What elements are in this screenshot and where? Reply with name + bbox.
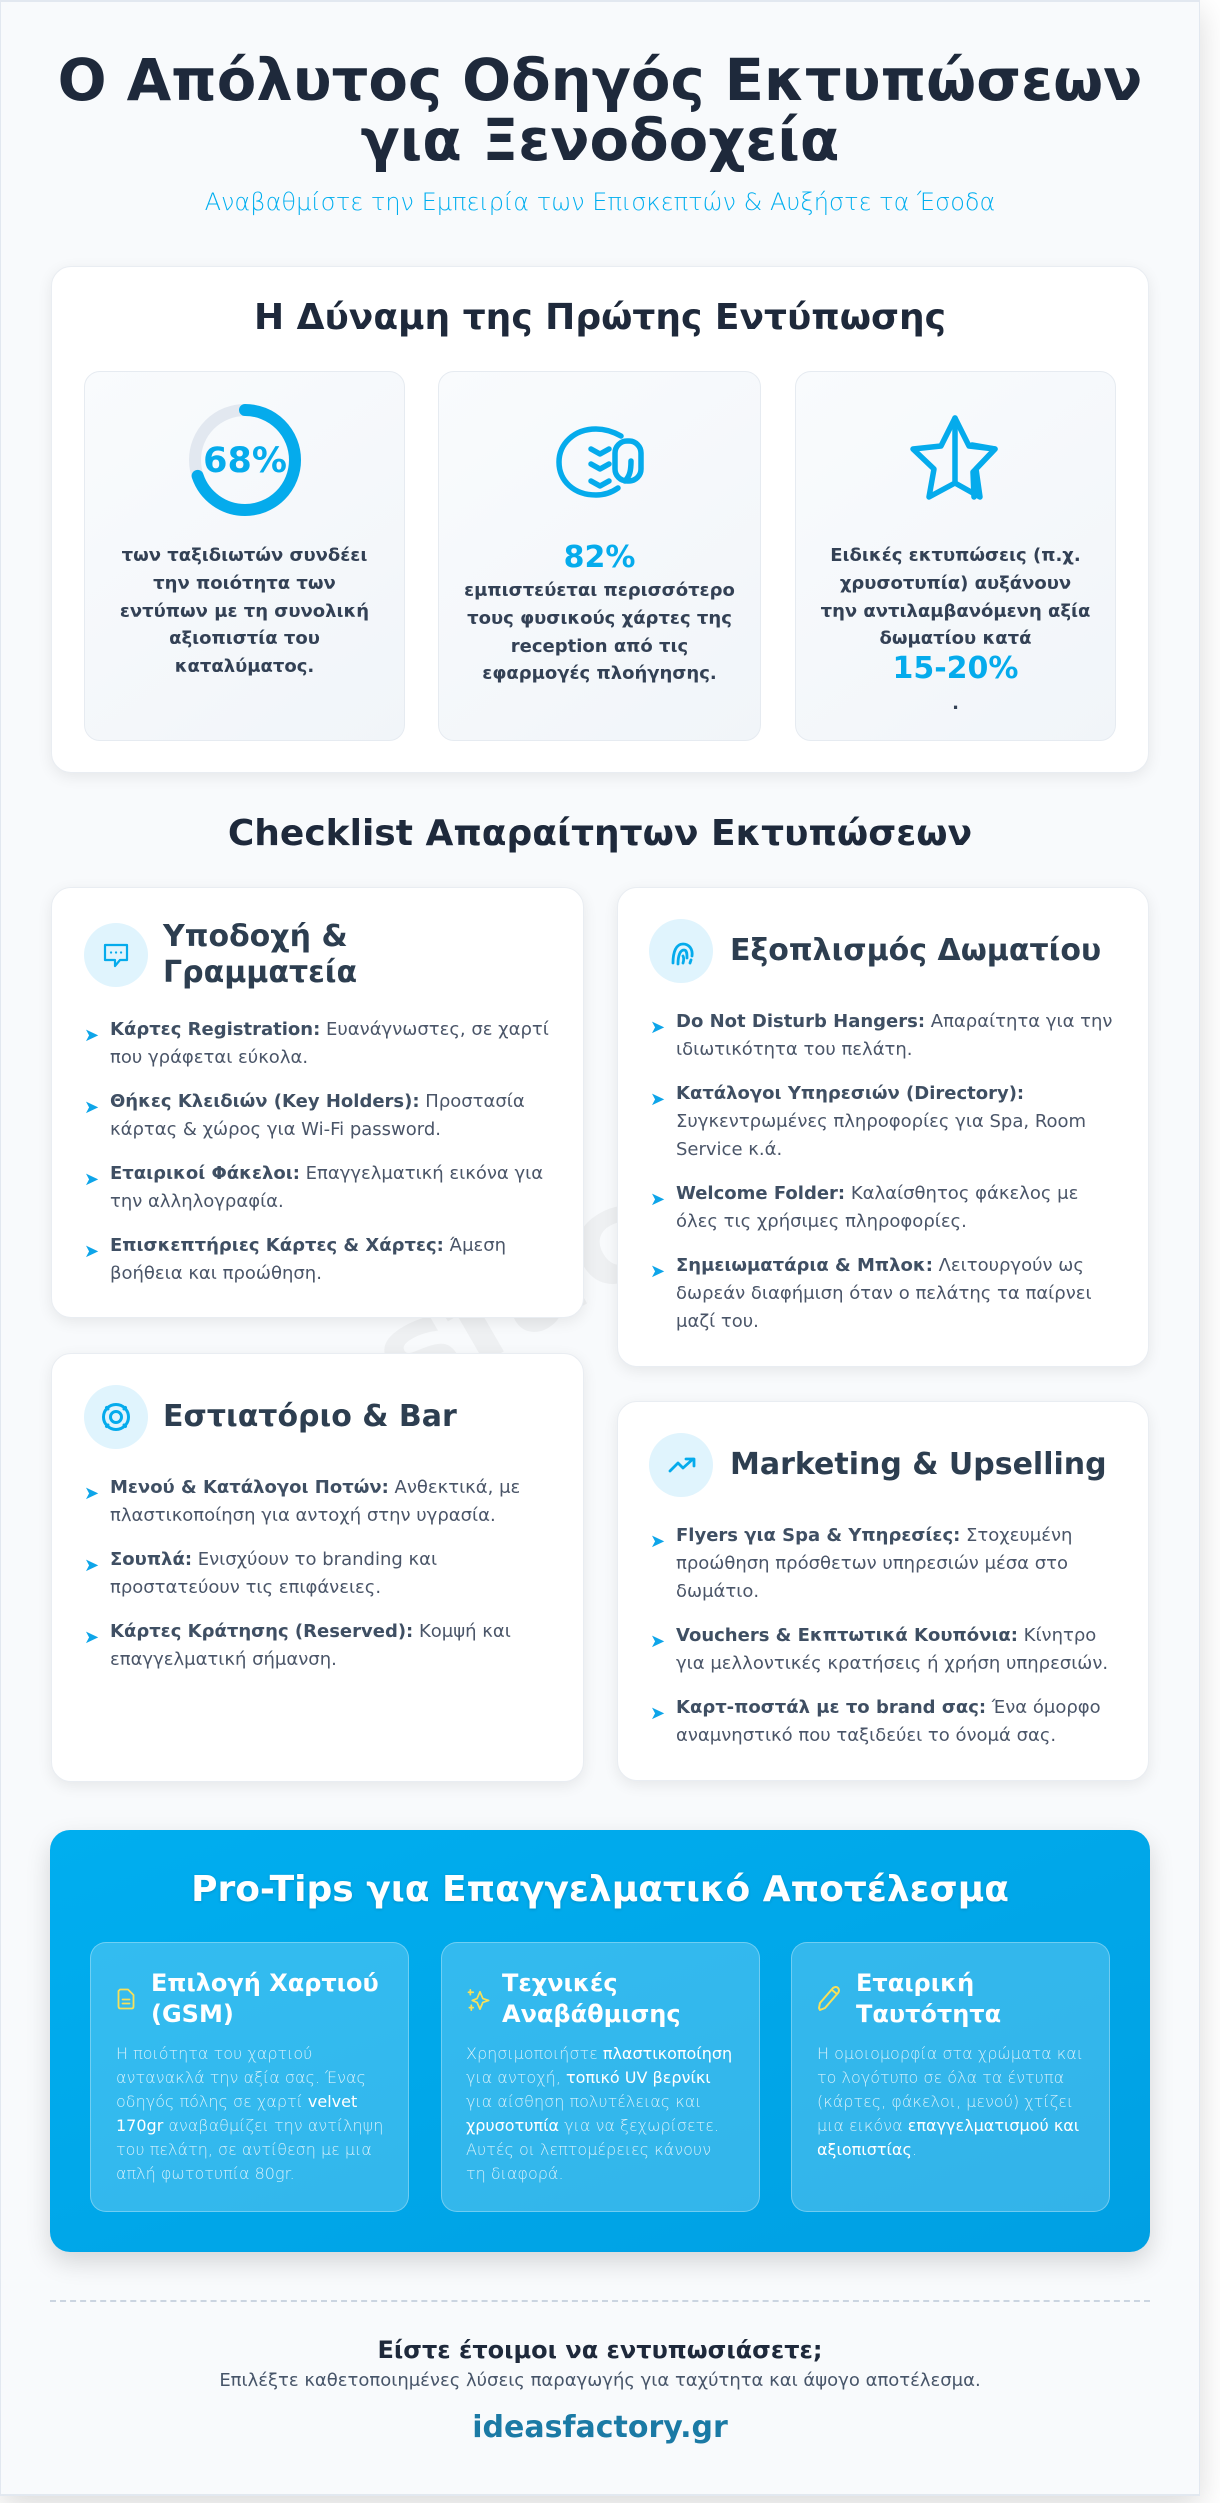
- text: ➤: [650, 1261, 665, 1282]
- item: [650, 1625, 1108, 1674]
- text: ➤: [84, 1025, 99, 1046]
- item: [84, 1477, 520, 1526]
- icon: trend arrow: [649, 1433, 713, 1497]
- item: Θήκες Κλειδιών (Key Holders): Προστασία: [110, 1091, 525, 1112]
- item: Flyers για Spa & Υπηρεσίες: Στοχευμένη: [676, 1525, 1072, 1546]
- item: την αλληλογραφία.: [110, 1191, 284, 1212]
- text: ➤: [650, 1017, 665, 1038]
- tip box 1: [90, 1942, 409, 2212]
- panel: pro tips: [50, 1830, 1150, 2252]
- title: για Ξενοδοχεία: [361, 107, 839, 174]
- text: ➤: [84, 1483, 99, 1504]
- item: δωμάτιο.: [676, 1581, 759, 1602]
- text: stat 3: [821, 545, 1090, 649]
- item: [650, 1183, 1078, 1232]
- text: tip 3: μια εικόνα επαγγελματισμού και: [817, 2116, 1079, 2135]
- tip box 3: [791, 1942, 1110, 2212]
- text: tip 1: 170gr αναβαθμίζει την αντίληψη: [116, 2116, 383, 2135]
- icon: card and chevrons: [556, 426, 644, 498]
- stat box 3: [795, 371, 1116, 741]
- panel: first impression: [51, 266, 1149, 773]
- icon: document: [118, 1988, 134, 2010]
- text: tip 1: απλή φωτοτυπία 80gr.: [116, 2164, 295, 2183]
- item: Σημειωματάρια & Μπλοκ: Λειτουργούν ως: [676, 1255, 1084, 1276]
- heading: tip 3: Εταιρική: [856, 1969, 974, 1997]
- heading: tip 3: Ταυτότητα: [856, 2000, 1001, 2028]
- footer text: Επιλέξτε καθετοποιημένες λύσεις παραγωγής για ταχύτητα και άψογο αποτέλεσμα.: [219, 2370, 981, 2391]
- heading: room equipment: Εξοπλισμός Δωματίου: [730, 933, 1101, 968]
- watermark: ideasfactory.gr: [80, 915, 1099, 1589]
- item: Welcome Folder: Καλαίσθητος φάκελος με: [676, 1183, 1078, 1204]
- text: stat 3 period: .: [952, 693, 959, 714]
- item: Κάρτες Registration: Ευανάγνωστες, σε χαρτί: [110, 1019, 549, 1040]
- item: πλαστικοποίηση για αντοχή στην υγρασία.: [110, 1505, 496, 1526]
- heading: restaurant: Εστιατόριο & Bar: [163, 1399, 457, 1434]
- item: προώθηση πρόσθετων υπηρεσιών μέσα στο: [676, 1553, 1068, 1574]
- text: tip 1: Η ποιότητα του χαρτιού: [116, 2044, 312, 2063]
- item: ιδιωτικότητα του πελάτη.: [676, 1039, 913, 1060]
- heading: tip 1: (GSM): [151, 2000, 234, 2028]
- text: stat 2: τους φυσικούς χάρτες της: [467, 608, 732, 629]
- item: [84, 1091, 525, 1140]
- item: [650, 1083, 1086, 1160]
- text: ➤: [84, 1169, 99, 1190]
- title: [58, 47, 1142, 174]
- text: stat 2: reception από τις: [511, 636, 688, 657]
- item: [84, 1163, 543, 1212]
- footer logo: ideasfactory.gr: [472, 2410, 728, 2445]
- title: Ο Απόλυτος Οδηγός Εκτυπώσεων: [58, 47, 1142, 114]
- text: ➤: [650, 1703, 665, 1724]
- text: stat 3: δωματίου κατά: [880, 628, 1031, 649]
- item: προστατεύουν τις επιφάνειες.: [110, 1577, 381, 1598]
- item: δωρεάν διαφήμιση όταν ο πελάτης τα παίρνει: [676, 1283, 1092, 1304]
- item: βοήθεια και προώθηση.: [110, 1263, 322, 1284]
- text: ➤: [650, 1631, 665, 1652]
- text: ➤: [84, 1097, 99, 1118]
- text: ➤: [84, 1555, 99, 1576]
- item: [84, 1019, 549, 1068]
- text: tip 1: αντανακλά την αξία σας. Ένας: [116, 2068, 366, 2087]
- item: Καρτ-ποστάλ με το brand σας: Ένα όμορφο: [676, 1697, 1101, 1718]
- text: stat 1: την ποιότητα των: [153, 573, 336, 594]
- text: stat 1: καταλύματος.: [175, 656, 314, 677]
- heading: reception: Υποδοχή &: [163, 919, 348, 954]
- text: tip 3: Η ομοιομορφία στα χρώματα και: [817, 2044, 1083, 2063]
- item: κάρτας & χώρος για Wi-Fi password.: [110, 1119, 441, 1140]
- item: μαζί του.: [676, 1311, 759, 1332]
- item: που γράφεται εύκολα.: [110, 1047, 308, 1068]
- item: Συγκεντρωμένες πληροφορίες για Spa, Room: [676, 1111, 1086, 1132]
- text: tip 3: αξιοπιστίας.: [817, 2140, 917, 2159]
- item: όλες τις χρήσιμες πληροφορίες.: [676, 1211, 967, 1232]
- item: [650, 1697, 1101, 1746]
- text: stat 2: εφαρμογές πλοήγησης.: [482, 663, 717, 684]
- text: tip 3: το λογότυπο σε όλα τα έντυπα: [817, 2068, 1064, 2087]
- heading: tip 2: Αναβάθμισης: [502, 2000, 681, 2028]
- text: tip 2: για αντοχή, τοπικό UV βερνίκι: [466, 2068, 711, 2087]
- panel: restaurant: [51, 1353, 584, 1782]
- text: stat 1: των ταξιδιωτών συνδέει: [122, 545, 367, 566]
- text: ➤: [650, 1089, 665, 1110]
- text: stat 1: [120, 545, 369, 677]
- footer divider: [50, 2300, 1150, 2302]
- item: [650, 1525, 1072, 1602]
- text: stat 2: εμπιστεύεται περισσότερο: [464, 580, 735, 601]
- panel: marketing: [617, 1401, 1149, 1781]
- heading: tip 3: [856, 1969, 1001, 2028]
- text: ➤: [84, 1627, 99, 1648]
- heading: checklist: Checklist Απαραίτητων Εκτυπώσεων: [228, 813, 972, 854]
- heading: tip 1: Επιλογή Χαρτιού: [151, 1969, 379, 1997]
- tip box 2: [441, 1942, 760, 2212]
- item: [84, 1621, 511, 1670]
- item: Κατάλογοι Υπηρεσιών (Directory):: [676, 1083, 1024, 1104]
- text: stat 1: εντύπων με τη συνολική: [120, 601, 369, 622]
- text: stat 1: αξιοπιστία του: [169, 628, 320, 649]
- text: ➤: [84, 1241, 99, 1262]
- item: αναμνηστικό που ταξιδεύει το όνομά σας.: [676, 1725, 1056, 1746]
- item: [650, 1011, 1112, 1060]
- text: tip 2: χρυσοτυπία για να ξεχωρίσετε.: [466, 2116, 719, 2135]
- item: [84, 1549, 437, 1598]
- item: για μελλοντικές κρατήσεις ή χρήση υπηρεσιών.: [676, 1653, 1108, 1674]
- text: tip 3: [817, 2044, 1083, 2159]
- heading: reception: Γραμματεία: [163, 955, 357, 990]
- item: Μενού & Κατάλογοι Ποτών: Ανθεκτικά, με: [110, 1477, 520, 1498]
- text: tip 1: [116, 2044, 383, 2183]
- item: [84, 1235, 506, 1284]
- heading: reception: [162, 919, 357, 990]
- text: ➤: [650, 1531, 665, 1552]
- heading: tip 2: Τεχνικές: [502, 1969, 618, 1997]
- stat box 2: [438, 371, 761, 741]
- heading: tip 2: [502, 1969, 681, 2028]
- icon: target: [84, 1385, 148, 1449]
- text: stat 2: [464, 580, 735, 684]
- icon: chat bubble: [84, 923, 148, 987]
- footer heading: Είστε έτοιμοι να εντυπωσιάσετε;: [378, 2336, 822, 2364]
- item: Επισκεπτήριες Κάρτες & Χάρτες: Άμεση: [110, 1235, 506, 1256]
- item: Σουπλά: Ενισχύουν το branding και: [110, 1549, 437, 1570]
- text: tip 3: (κάρτες, φάκελοι, μενού) χτίζει: [817, 2092, 1073, 2111]
- text: stat 3: την αντιλαμβανόμενη αξία: [821, 601, 1090, 622]
- text: ➤: [650, 1189, 665, 1210]
- text: tip 1: οδηγός πόλης σε χαρτί velvet: [116, 2092, 357, 2111]
- heading: tip 1: [151, 1969, 379, 2028]
- item: Vouchers & Εκπτωτικά Κουπόνια: Κίνητρο: [676, 1625, 1096, 1646]
- item: Service κ.ά.: [676, 1139, 782, 1160]
- icon: star: [910, 415, 998, 500]
- text: tip 2: Χρησιμοποιήστε πλαστικοποίηση: [466, 2044, 732, 2063]
- text: tip 2: για αίσθηση πολυτέλειας και: [466, 2092, 701, 2111]
- number: 15-20%: 15-20%: [892, 651, 1018, 686]
- text: stat 3: Ειδικές εκτυπώσεις (π.χ.: [830, 545, 1081, 566]
- item: [650, 1255, 1092, 1332]
- panel: room equipment: [617, 887, 1149, 1367]
- item: επαγγελματική σήμανση.: [110, 1649, 337, 1670]
- icon: sparkles: [468, 1989, 490, 2011]
- heading: marketing: Marketing & Upselling: [730, 1447, 1107, 1482]
- text: tip 2: τη διαφορά.: [466, 2164, 564, 2183]
- panel: reception: [51, 887, 584, 1318]
- item: Κάρτες Κράτησης (Reserved): Κομψή και: [110, 1621, 511, 1642]
- icon: pencil: [818, 1986, 840, 2011]
- text: tip 2: Αυτές οι λεπτομέρειες κάνουν: [466, 2140, 711, 2159]
- stat box 1: [84, 371, 405, 741]
- heading: pro tips: Pro-Tips για Επαγγελματικό Αποτέλεσμα: [191, 1869, 1009, 1910]
- number: 82%: 82%: [564, 540, 635, 575]
- icon: hanger: [649, 919, 713, 983]
- item: Do Not Disturb Hangers: Απαραίτητα για την: [676, 1011, 1112, 1032]
- text: stat 3: χρυσοτυπία) αυξάνουν: [840, 573, 1071, 594]
- subtitle: Αναβαθμίστε την Εμπειρία των Επισκεπτών & Αυξήστε τα Έσοδα: [205, 188, 995, 216]
- ring chart: 68%: 68%: [203, 441, 287, 481]
- item: Εταιρικοί Φάκελοι: Επαγγελματική εικόνα για: [110, 1163, 543, 1184]
- text: tip 2: [466, 2044, 732, 2183]
- heading: first impression: Η Δύναμη της Πρώτης Εντύπωσης: [254, 297, 946, 338]
- ring chart: 68%: [189, 404, 301, 516]
- text: tip 1: του πελάτη, σε αντίθεση με μια: [116, 2140, 372, 2159]
